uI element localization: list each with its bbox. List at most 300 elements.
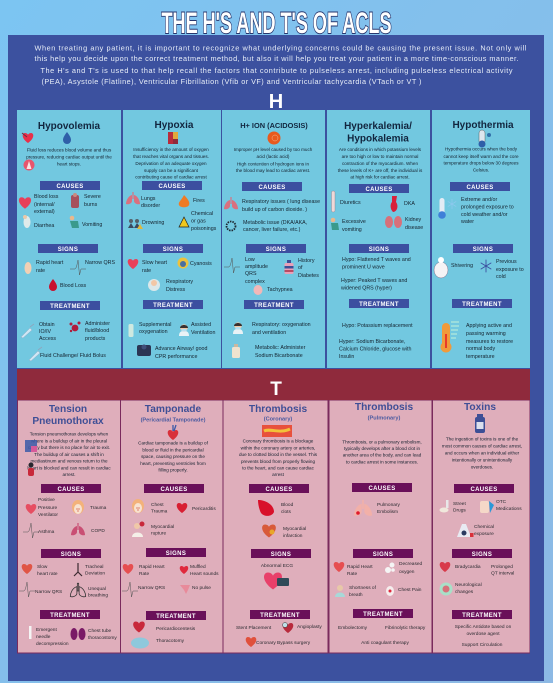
signs text	[341, 257, 411, 292]
cause: metabolic issue	[226, 220, 307, 233]
heading: Hyperkalemia/Hypokalemia	[344, 121, 412, 144]
cause: trauma: Trauma	[90, 505, 107, 511]
cause: OTC medications	[480, 499, 522, 513]
panel: Hypothermia	[432, 110, 530, 368]
cause: extreme cold: prolonged exposure to	[461, 204, 514, 210]
sign: chest pain: Chest Pain	[398, 587, 422, 593]
title: THE H'S AND T'S OF ACLS	[162, 7, 392, 40]
description: at high risk for cardiac arrest.	[350, 174, 410, 180]
heading: Tamponade: Tamponade	[145, 404, 202, 415]
signs bar: SIGNS	[61, 552, 81, 558]
heading: Hypovolemia: Hypovolemia	[38, 121, 101, 132]
intro text: When treating any patient, it is important to recognize what underlying concerns could be causing the present issue. Not only will	[34, 44, 527, 52]
description: most common causes of cardiac arrest,	[442, 444, 522, 448]
treatment texts: overdose agent	[466, 631, 500, 637]
sign: slow heart rate: Slow heart	[142, 260, 168, 266]
treatment texts: Embolectomy	[338, 625, 368, 631]
description: are too high or low to maintain normal	[342, 154, 418, 159]
treatment: advanced airway	[137, 344, 207, 360]
cause: asthma	[23, 523, 55, 538]
sign: no pulse: No pulse	[192, 585, 211, 591]
red T band	[17, 369, 530, 400]
cause: chest trauma	[132, 499, 168, 514]
icon: thermometer	[478, 130, 491, 148]
treatment bar: TREATMENT	[50, 613, 90, 619]
cause: COPD	[71, 523, 105, 535]
treatment: needle decompression: Emergent	[36, 627, 57, 633]
sign: prolonged QT	[491, 564, 514, 576]
treatment: thoracotomy	[131, 638, 185, 648]
heading: Hypothermia: Hypothermia	[452, 120, 514, 131]
treatment: chest tube	[70, 628, 117, 641]
signs bar	[41, 549, 101, 558]
description: mediastinum and venous return to the	[30, 458, 108, 464]
panel: Hyperkalemia/Hypokalemia	[327, 110, 430, 368]
treatment bar: TREATMENT	[359, 302, 399, 308]
description: contraction of the myocardium. When	[342, 161, 418, 166]
treatment bar: TREATMENT	[462, 613, 502, 619]
panel: Hypoxia	[123, 110, 221, 368]
icon: heart	[168, 425, 178, 440]
description	[342, 440, 422, 464]
treatment: fluid/blood	[70, 321, 110, 342]
cause: chemical or gas poisonings: or gas	[191, 218, 206, 224]
sign: tachypnea: Tachypnea	[267, 287, 293, 293]
description	[442, 436, 522, 470]
panel: Toxins	[433, 400, 530, 652]
causes bar: CAUSES	[368, 486, 396, 492]
sign: cyanosis: Cyanosis	[190, 261, 212, 267]
sign: narrow QRS: Narrow QRS	[85, 260, 115, 266]
signs text: Hyper: Peaked T waves and	[341, 278, 407, 284]
cause: extreme cold: cold weather and/or	[461, 212, 508, 218]
heading: H+ ion: H+ ION (ACIDOSIS)	[240, 121, 308, 130]
treatment texts	[455, 624, 512, 648]
sign: decreased oxygen: oxygen	[399, 570, 415, 575]
cause: lungs disorder: Lungs	[141, 196, 156, 202]
treatment: advanced airway: Advance Airway/ good	[155, 346, 207, 352]
description: Improper pH level caused by too much	[234, 147, 313, 152]
treatment: coronary bypass: Coronary Bypass surgery	[256, 640, 311, 646]
intro text: this help you decide upon the correct treatment method, but also it will help you treat your patient in a more time-conscious manner.	[34, 54, 518, 63]
sign: no pulse	[180, 585, 211, 594]
signs text: Hypo: Flattened T waves and	[342, 257, 411, 263]
cause: blood clots	[258, 500, 294, 516]
treatment: needle decompression	[29, 626, 69, 647]
treatment: assisted ventilation: Assisted	[191, 322, 211, 328]
description: heart, preventing ventricles from	[140, 461, 206, 466]
treatment texts: Fibrinolytic therapy	[385, 625, 426, 631]
description	[133, 147, 209, 180]
cause: extreme cold: Extreme and/or	[461, 197, 497, 203]
cause: severe burns	[71, 193, 101, 208]
heading: Tension Pneumothorax: Tension	[49, 404, 87, 415]
treatment: chest tube: thoracostomy	[88, 635, 117, 641]
cause: myocardial infarction: Myocardial	[283, 526, 306, 532]
treatment bar: TREATMENT	[260, 613, 300, 619]
heading: Thrombosis Coronary: Thrombosis	[249, 404, 307, 415]
cause: blood loss: external)	[34, 209, 55, 215]
treatment: IO/IV: Obtain	[39, 322, 55, 328]
description: heart is blocked and can result in cardiac	[27, 466, 111, 470]
heading: Tamponade	[141, 404, 206, 424]
treatment bar	[40, 301, 100, 310]
sign: abnormal ECG	[261, 563, 293, 590]
sign: shortness of breath: Shortness of	[349, 585, 377, 591]
causes bar: CAUSES	[365, 187, 393, 193]
description: to cardiac arrest in some instances.	[346, 460, 418, 464]
treatment: warming	[440, 322, 513, 360]
cause: positive pressure ventilator	[26, 497, 58, 518]
treatment: needle decompression: needle	[36, 634, 51, 640]
causes bar: CAUSES	[470, 487, 498, 493]
description	[138, 440, 209, 472]
treatment: supplemental oxygenation	[128, 322, 171, 337]
causes bar	[454, 484, 514, 493]
description: Cardiac tamponade is a buildup of	[138, 440, 209, 446]
treatment bar: TREATMENT	[254, 303, 294, 309]
treatment: supplemental oxygenation: Supplemental	[139, 322, 171, 328]
sign: unequal breathing: Unequal	[88, 586, 106, 592]
sign: tracheal deviation: Deviation	[85, 570, 105, 576]
description	[26, 148, 112, 166]
panel: Thrombosis (Coronary)	[224, 400, 328, 652]
signs bar: SIGNS	[266, 247, 286, 253]
sign: narrow QRS: Narrow QRS	[35, 589, 62, 595]
treatment: respiratory	[233, 322, 311, 336]
description: The buildup of air causes a shift in	[34, 452, 104, 457]
causes bar	[249, 484, 309, 493]
treatment bar: TREATMENT	[363, 612, 403, 618]
signs bar	[251, 549, 311, 558]
sign: previous exposure to cold: Previous	[496, 259, 517, 265]
description: arrest.	[62, 472, 76, 477]
cause: diuretics: Diuretics	[340, 200, 361, 206]
cause: respiratory issues: Respiratory issues ( lung disease	[242, 199, 320, 205]
treatment: thoracotomy: Thoracotomy	[156, 638, 185, 644]
sign: unequal breathing: breathing	[88, 592, 108, 598]
description: heart stops.	[57, 162, 81, 166]
description: Celsius.	[473, 168, 489, 172]
sign: slow heart rate	[128, 259, 168, 274]
treatment: needle decompression: decompression	[36, 641, 69, 647]
sign: tachypnea	[254, 285, 293, 295]
treatment bar	[146, 611, 206, 620]
intro text: The H's and T's is used to that help recall the factors that contribute to pulseless arrest, including pulseless electrical activity	[40, 66, 513, 75]
sign: slow heart rate: heart rate	[37, 571, 58, 577]
signs bar: SIGNS	[58, 247, 78, 253]
sign: previous exposure to cold: exposure to	[496, 267, 524, 273]
cause: chemical exposure: Chemical	[474, 524, 494, 530]
sign: history of diabetes: History	[298, 258, 315, 264]
cause: DKA: DKA	[404, 201, 415, 207]
cause: OTC medications: OTC	[496, 499, 507, 505]
cause: fires: Fires	[193, 198, 205, 204]
cause: kidney disease	[385, 216, 423, 231]
treatment text: Insulin	[339, 354, 354, 360]
cause: metabolic issue: cancer, liver failure, etc.)	[243, 227, 301, 233]
cause: positive pressure ventilator: Pressure	[38, 505, 58, 511]
description: where is a buildup of air in the pleural	[31, 438, 107, 444]
signs bar	[38, 244, 98, 253]
description: Tension pneumothorax develops when	[30, 432, 109, 436]
cause: chemical exposure: exposure	[474, 531, 494, 537]
treatment bar: TREATMENT	[462, 302, 502, 308]
treatment bar	[353, 609, 413, 618]
signs bar	[353, 549, 413, 558]
sign: muffled heart sounds	[180, 564, 219, 577]
treatment: warming: temperature	[466, 354, 495, 360]
treatment: IO/IV: Access	[39, 336, 56, 342]
treatment texts: Support Circulation	[462, 642, 503, 648]
treatment: angioplasty	[282, 622, 322, 633]
treatment: coronary bypass	[246, 637, 311, 647]
icon: pink circle	[24, 160, 34, 170]
treatment: assisted ventilation: Ventilation	[191, 330, 215, 336]
description	[234, 147, 313, 173]
cause: extreme cold	[438, 197, 514, 225]
causes bar	[450, 182, 510, 191]
treatment bar	[349, 299, 409, 308]
sign: neurological changes: changes	[455, 589, 474, 595]
description: temperature drops below 30 degrees	[443, 160, 519, 166]
cause: pericarditis: Pericarditis	[192, 506, 216, 512]
signs text: widened QRS (hyper)	[341, 286, 392, 292]
sign: history of diabetes: of	[298, 265, 303, 271]
sign: muffled heart sounds: Muffled	[190, 564, 206, 570]
cause: blood loss: (internal/	[34, 202, 55, 208]
treatment bar	[452, 299, 512, 308]
cause: severe burns: Severe	[84, 194, 101, 200]
icon: clotted vessel	[262, 425, 292, 437]
treatment bar	[143, 300, 203, 309]
cause: vomiting	[70, 216, 102, 228]
cause: DKA	[391, 196, 415, 212]
cause: street drugs: Street	[453, 501, 466, 507]
sign: history of diabetes	[284, 258, 319, 279]
panel: Hypovolemia	[17, 110, 121, 368]
signs bar: SIGNS	[166, 551, 186, 557]
sign: respiratory distress: Respiratory	[166, 279, 193, 285]
sign: neurological changes: Neurological	[455, 582, 482, 588]
causes bar	[242, 182, 302, 191]
cause: pericarditis	[177, 503, 216, 513]
treatment: chest tube: Chest tube	[88, 628, 112, 634]
heading: Tension Pneumothorax: Pneumothorax	[32, 416, 104, 427]
treatment: metabolic	[232, 344, 306, 359]
cause: diarrhea: Diarrhea	[34, 223, 54, 229]
description	[443, 146, 519, 172]
causes bar: CAUSES	[466, 185, 494, 191]
cause: chemical or gas poisonings: Chemical	[191, 211, 213, 217]
heading: Thrombosis Coronary: (Coronary)	[264, 416, 292, 422]
description: acid (lactic acid)	[257, 154, 290, 159]
causes bar	[349, 184, 409, 193]
sign: cyanosis	[178, 258, 212, 268]
treatment bar: TREATMENT	[153, 303, 193, 309]
treatment texts	[338, 625, 426, 646]
sign: rapid heart rate	[24, 260, 64, 274]
description: typically develops after a blood clot in	[344, 446, 420, 451]
treatment bar	[250, 610, 310, 619]
sign: prolonged QT: QT interval	[491, 570, 514, 576]
panel: Tension Pneumothorax	[18, 400, 120, 652]
treatment: supplemental oxygenation: oxygenation	[139, 329, 168, 335]
treatment: warming: normal body	[466, 346, 495, 352]
treatment text	[339, 323, 413, 360]
treatment text: Hyper: Sodium Bicarbonate,	[339, 339, 405, 345]
cause: chest trauma: Chest	[151, 502, 164, 508]
causes bar: CAUSES	[265, 487, 293, 493]
cause: pulmonary embolism: Pulmonary	[377, 502, 401, 508]
sign: low amplitude QRS: complex	[245, 279, 265, 285]
description: The ingestion of toxins is one of the	[446, 436, 519, 442]
treatment texts: Anti coagulant therapy	[361, 640, 409, 646]
treatment: fluid/blood: fluid/blood	[85, 328, 109, 334]
cause: fires	[179, 195, 205, 207]
description: overdoses.	[471, 464, 493, 470]
sign: bradycardia	[440, 562, 481, 572]
panel: Tamponade	[121, 400, 222, 652]
description: these levels of K+ are off, the individual is	[338, 168, 423, 173]
treatment: angioplasty: Angioplasty	[297, 624, 322, 630]
icon: overlapping pictogram	[25, 440, 37, 452]
sign: chest pain	[386, 586, 422, 596]
description: to the heart, and can cause cardiac	[242, 466, 315, 470]
heading: Toxins: Toxins	[464, 402, 496, 413]
treatment: stent placement: Stent Placement	[236, 625, 272, 631]
description: cavity but there is no place for air to exit.	[28, 445, 110, 450]
treatment bar: TREATMENT	[50, 304, 90, 310]
panel: Thrombosis (Pulmonary)	[330, 400, 432, 652]
cause: kidney disease: disease	[405, 225, 423, 231]
cause: chest trauma: Trauma	[151, 508, 168, 514]
cause: myocardial infarction: infarction	[283, 533, 303, 539]
description: that reaches vital organs and tissues.	[133, 154, 209, 159]
description: Coronary thrombosis is a blockage	[243, 438, 314, 444]
intro text: (PEA), Asystole (Flatline), Ventricular Fibrillation (Vfib or VF) and Ventricular tachycardia (VTach or VT )	[42, 77, 421, 86]
heading: Hypoxia: Hypoxia	[155, 120, 194, 131]
section letter T: T	[270, 379, 282, 400]
cause: pulmonary embolism	[354, 500, 401, 516]
cause: respiratory issues	[224, 197, 320, 213]
cause: positive pressure ventilator: Positive	[38, 497, 55, 503]
sign: history of diabetes: Diabetes	[298, 273, 319, 279]
description: cannot keep itself warm and the core	[443, 154, 519, 159]
sign: narrow QRS: Narrow QRS	[138, 585, 165, 591]
icon: blood cells	[168, 132, 178, 144]
cause: street drugs: Drugs	[453, 508, 466, 514]
causes bar: CAUSES	[258, 185, 286, 191]
cause: excessive vomiting: vomiting	[342, 227, 362, 233]
sign: unequal breathing	[70, 583, 108, 598]
cause: blood clots: Blood	[281, 502, 294, 508]
description: another area of the body, and can lead	[343, 452, 422, 458]
treatment: IO/IV	[21, 322, 56, 342]
heading: Thrombosis Pulmonary	[355, 402, 413, 422]
sign: rapid heart rate: rate	[36, 268, 45, 274]
treatment texts: Specific Antidote based on	[455, 624, 512, 630]
signs bar	[452, 549, 512, 558]
cause: myocardial rupture: Myocardial	[151, 524, 174, 530]
description: Hypothermia occurs when the body	[445, 146, 518, 152]
cause: blood clots: clots	[281, 509, 291, 515]
signs bar	[453, 244, 513, 253]
description: arrest	[272, 472, 285, 477]
causes bar: CAUSES	[57, 487, 85, 493]
heading: Thrombosis Pulmonary: (Pulmonary)	[368, 416, 400, 422]
treatment: warming: measures to restore	[466, 339, 513, 345]
heading: Hyperkalemia/Hypokalemia: Hypokalemia	[347, 134, 409, 144]
cause: trauma	[72, 500, 107, 514]
sign: muffled heart sounds: Heart sounds	[190, 571, 219, 577]
cause: metabolic issue: Metabolic issue (DKA/AKA,	[243, 220, 307, 226]
sign: rapid heart rate	[123, 564, 165, 577]
signs bar: SIGNS	[369, 247, 389, 253]
sign: tracheal deviation: Tracheal	[85, 564, 104, 570]
causes bar: CAUSES	[56, 184, 84, 190]
sign: neurological changes	[440, 582, 482, 596]
cause: respiratory issues: build up of carbon dioxide. )	[242, 207, 307, 213]
sign: shivering: Shivering	[451, 263, 473, 269]
cause: chemical exposure	[457, 524, 494, 537]
cause: asthma: Asthma	[38, 529, 55, 535]
pink panel backing	[17, 400, 530, 654]
sign: prolonged QT: Prolonged	[491, 564, 513, 570]
heading: Tension Pneumothorax	[32, 404, 104, 427]
signs bar: SIGNS	[473, 247, 493, 253]
sign: low amplitude QRS: Low	[245, 257, 255, 263]
sign: shivering	[434, 257, 473, 278]
treatment bar	[244, 300, 304, 309]
treatment: fluid/blood: products	[85, 336, 106, 342]
cause: myocardial rupture	[132, 522, 174, 537]
cause: lungs disorder: disorder	[141, 203, 160, 209]
sign: rapid heart rate	[334, 562, 373, 577]
sign: narrow QRS	[70, 260, 115, 275]
cause: excessive vomiting	[331, 218, 366, 233]
icon: figure	[28, 462, 34, 476]
cause: severe burns: burns	[84, 202, 98, 208]
signs bar	[246, 244, 306, 253]
causes bar	[144, 484, 204, 493]
sign: narrow QRS	[19, 582, 62, 597]
description	[239, 438, 318, 477]
description: Insufficiency in the amount of oxygen	[133, 147, 209, 152]
sign: blood loss	[49, 279, 87, 291]
signs bar	[143, 244, 203, 253]
sign: low amplitude QRS	[224, 257, 268, 285]
treatment: IO/IV: IO/IV	[39, 329, 52, 335]
causes bar	[142, 181, 202, 190]
signs bar: SIGNS	[472, 552, 492, 558]
heading: Thrombosis Coronary	[249, 404, 307, 422]
sign: rapid heart rate: Rapid Heart	[139, 564, 165, 570]
cause: blood loss: Blood loss	[34, 194, 59, 200]
treatment bar: TREATMENT	[156, 614, 196, 620]
sign: respiratory distress: Distress	[166, 287, 185, 293]
cause: drowning	[128, 219, 164, 229]
sign: blood loss: Blood Loss	[60, 283, 87, 289]
heading: Hyperkalemia/Hypokalemia: Hyperkalemia/	[344, 121, 412, 132]
sign: decreased oxygen: Decreased	[399, 561, 423, 567]
icon: poison bottle	[475, 414, 485, 433]
sign: tracheal deviation	[74, 563, 105, 576]
sign: low amplitude QRS: amplitude	[245, 264, 268, 270]
description: pressure, reducing cardiac output until the	[26, 154, 112, 160]
treatment: fluid/blood: Administer	[85, 321, 110, 327]
sign: shortness of breath: breath	[349, 592, 363, 598]
